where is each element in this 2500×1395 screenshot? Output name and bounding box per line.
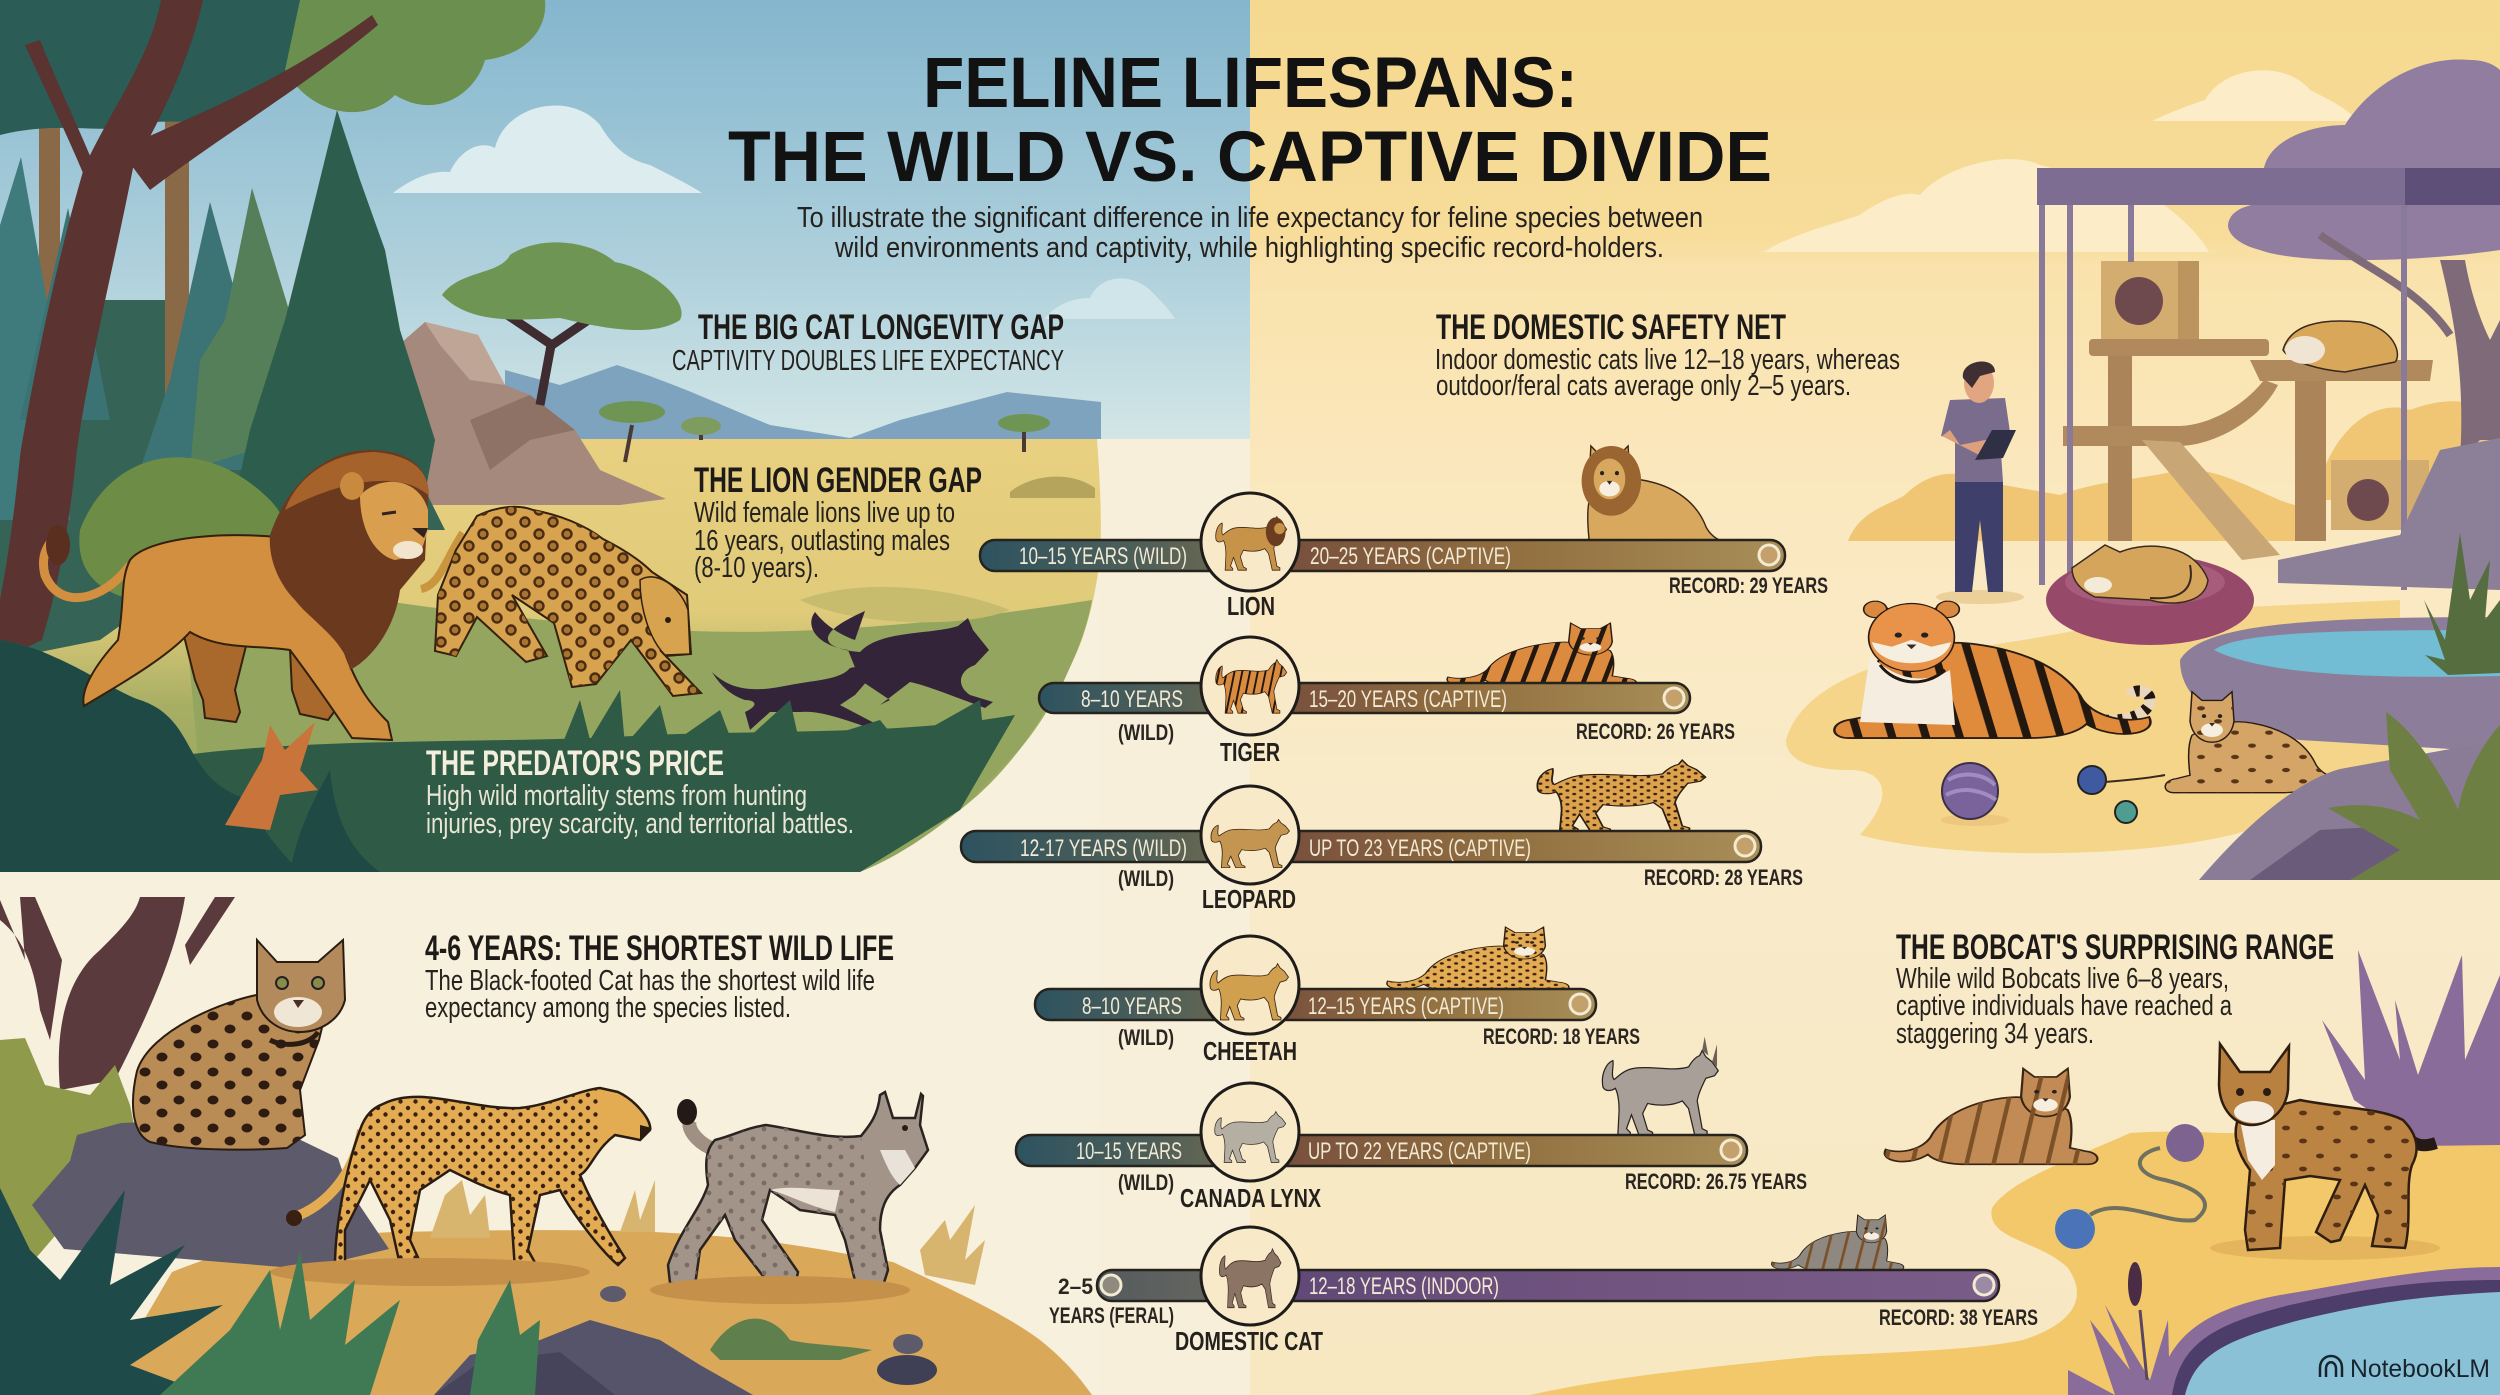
grass band xyxy=(180,560,1092,810)
callout: lion gender gap: 16 years, outlasting males xyxy=(694,525,950,557)
values: leopard: 12-17 YEARS (WILD) xyxy=(1020,835,1187,862)
pond xyxy=(2180,617,2500,752)
rock outcrop xyxy=(393,322,666,505)
bar: domestic cat xyxy=(1097,1270,1999,1301)
values: leopard: RECORD: 28 YEARS xyxy=(1644,865,1803,890)
values: lynx xyxy=(1076,1138,1807,1213)
chart row: canada lynx xyxy=(1016,1037,1807,1213)
animal on bar: lion xyxy=(1566,446,1744,558)
animal on bar: leopard xyxy=(1537,760,1706,831)
toy balls xyxy=(1941,763,2165,826)
person xyxy=(1936,362,2024,604)
values: lynx: CANADA LYNX xyxy=(1180,1183,1321,1213)
icon: lynx xyxy=(1201,1083,1299,1181)
chart row: domestic cat xyxy=(1049,1215,2038,1356)
panel: wild scene xyxy=(0,0,1175,872)
callout: domestic safety net: THE DOMESTIC SAFETY NET xyxy=(1436,308,1786,347)
spiky plant xyxy=(2424,533,2500,675)
callout: predator's price: injuries, prey scarcity, and territorial battles. xyxy=(426,808,854,840)
callout: shortest wild life: 4-6 YEARS: THE SHORTEST WILD LIFE xyxy=(425,929,894,968)
callout: bobcat range xyxy=(1896,928,2334,1050)
values: leopard: LEOPARD xyxy=(1202,884,1296,914)
chart row: leopard xyxy=(961,760,1803,914)
cat tree xyxy=(2063,261,2433,560)
animal on bar: lynx xyxy=(1602,1037,1718,1135)
pine trees xyxy=(0,100,435,520)
grey rock xyxy=(2278,438,2500,590)
animal: bobcat standing xyxy=(2210,1044,2440,1260)
values: cheetah: RECORD: 18 YEARS xyxy=(1483,1024,1640,1049)
foreground rocks xyxy=(434,1320,753,1395)
title: THE WILD VS. CAPTIVE DIVIDE xyxy=(728,118,1772,197)
callout: lion gender gap xyxy=(694,461,982,584)
animal: bobcat resting xyxy=(2165,692,2357,793)
values: leopard: (WILD) xyxy=(1118,866,1174,891)
olive shrubs xyxy=(0,1038,135,1300)
callout: domestic safety net: Indoor domestic cats live 12–18 years, whereas xyxy=(1435,344,1900,376)
callout: bobcat range: While wild Bobcats live 6–8 years, xyxy=(1896,963,2229,995)
hill xyxy=(100,1230,1092,1395)
grass tuft right xyxy=(430,1180,985,1285)
values: cheetah: 12–15 YEARS (CAPTIVE) xyxy=(1308,993,1504,1020)
clouds left xyxy=(393,106,1175,319)
icon: leopard xyxy=(1201,786,1299,884)
forest backdrop xyxy=(0,240,445,660)
callout: predator's price xyxy=(426,744,854,840)
sand ground xyxy=(1530,1132,2500,1395)
icon: domestic cat xyxy=(1201,1227,1299,1325)
big tree trunk xyxy=(0,0,378,660)
orange bushes xyxy=(1848,470,2295,541)
animal on bar: domestic cat xyxy=(1772,1215,1904,1271)
chart row: cheetah xyxy=(1035,927,1640,1066)
chart row: lion xyxy=(980,446,1828,621)
values: tiger: RECORD: 26 YEARS xyxy=(1576,719,1735,744)
callout: predator's price: THE PREDATOR'S PRICE xyxy=(426,744,724,783)
callout: lion gender gap: Wild female lions live up to xyxy=(694,497,955,529)
yarn toys xyxy=(2055,1124,2205,1249)
callout: domestic safety net: outdoor/feral cats average only 2–5 years. xyxy=(1436,370,1851,402)
animal: black-footed cat xyxy=(133,940,345,1150)
callout: big cat longevity gap: CAPTIVITY DOUBLES LIFE EXPECTANCY xyxy=(672,345,1064,377)
reeds xyxy=(2068,1262,2170,1395)
icon: cheetah xyxy=(1201,936,1299,1034)
callout: predator's price: High wild mortality stems from hunting xyxy=(426,780,807,812)
bar: cheetah xyxy=(1035,989,1596,1020)
animal: lion xyxy=(43,450,428,740)
animal: leopard xyxy=(421,507,701,696)
values: cheetah: 8–10 YEARS xyxy=(1082,993,1182,1020)
title: FELINE LIFESPANS: xyxy=(923,44,1578,123)
bar: lynx xyxy=(1016,1135,1747,1166)
acacia tree xyxy=(442,242,682,405)
purple plant xyxy=(2322,950,2500,1146)
tree trunk xyxy=(0,897,235,1090)
values: lion: LION xyxy=(1227,591,1275,621)
values: domestic cat: YEARS (FERAL) xyxy=(1049,1303,1174,1328)
bar: leopard xyxy=(961,831,1761,862)
panel: lower-right scene xyxy=(1530,950,2500,1395)
callout: lion gender gap: (8-10 years). xyxy=(694,552,819,584)
animal: tiger resting xyxy=(1834,601,2150,738)
callout: lion gender gap: THE LION GENDER GAP xyxy=(694,461,982,500)
icon: tiger xyxy=(1201,637,1299,735)
foreground foliage xyxy=(0,640,380,872)
dark foreground xyxy=(0,640,1015,872)
values: leopard: UP TO 23 YEARS (CAPTIVE) xyxy=(1309,835,1531,862)
animal: bobcat lying xyxy=(1885,1069,2097,1164)
chart row: tiger xyxy=(1039,623,1735,767)
values: lion: 10–15 YEARS (WILD) xyxy=(1019,543,1187,570)
pet bed and cat xyxy=(2046,545,2254,645)
values: lynx: 10–15 YEARS xyxy=(1076,1138,1182,1165)
callout: domestic safety net xyxy=(1435,308,1900,402)
subtitle: wild environments and captivity, while highlighting specific record-holders. xyxy=(834,232,1664,264)
pond xyxy=(2157,1267,2500,1395)
values: lion: 20–25 YEARS (CAPTIVE) xyxy=(1310,543,1511,570)
rock xyxy=(32,1118,389,1269)
values: tiger: 8–10 YEARS xyxy=(1081,686,1183,713)
values: domestic cat xyxy=(1049,1273,2038,1356)
tree canopy xyxy=(0,0,545,135)
title xyxy=(728,44,1772,197)
values: lynx: (WILD) xyxy=(1118,1170,1174,1195)
values: domestic cat: 12–18 YEARS (INDOOR) xyxy=(1309,1273,1499,1300)
callout: shortest wild life: The Black-footed Cat has the shortest wild life xyxy=(425,965,875,997)
animal: lynx xyxy=(668,1092,928,1295)
watermark: NotebookLM: NotebookLM xyxy=(2350,1355,2490,1383)
grass tufts xyxy=(560,690,985,790)
animal: cheetah xyxy=(286,1088,652,1270)
values: tiger xyxy=(1081,686,1735,767)
values: lynx: RECORD: 26.75 YEARS xyxy=(1625,1169,1807,1194)
callout: big cat longevity gap xyxy=(672,308,1064,377)
mountains xyxy=(505,365,1101,439)
clouds right xyxy=(1764,70,2357,252)
values: domestic cat: 2–5 xyxy=(1058,1274,1093,1299)
callout: bobcat range: staggering 34 years. xyxy=(1896,1018,2094,1050)
values: cheetah: (WILD) xyxy=(1118,1025,1174,1050)
subtitle: To illustrate the significant difference in life expectancy for feline species between xyxy=(797,202,1703,234)
values: lion xyxy=(1019,543,1828,621)
savanna field xyxy=(0,439,1101,872)
values: tiger: 15–20 YEARS (CAPTIVE) xyxy=(1309,686,1507,713)
values: tiger: TIGER xyxy=(1220,737,1280,767)
subtitle xyxy=(797,202,1703,264)
animal: dark silhouettes xyxy=(712,611,993,730)
values: cheetah: CHEETAH xyxy=(1203,1036,1297,1066)
roof xyxy=(2037,168,2500,205)
foreground leaves xyxy=(2328,712,2500,880)
callout: shortest wild life: expectancy among the species listed. xyxy=(425,992,791,1024)
values: domestic cat: RECORD: 38 YEARS xyxy=(1879,1305,2038,1330)
foreground rock right xyxy=(2199,740,2500,880)
values: leopard xyxy=(1020,835,1803,914)
sleeping lioness xyxy=(2283,321,2397,372)
orange plant xyxy=(225,722,318,830)
foreground plants xyxy=(0,1188,540,1395)
callout: bobcat range: captive individuals have reached a xyxy=(1896,990,2233,1022)
callout: big cat longevity gap: THE BIG CAT LONGEVITY GAP xyxy=(698,308,1064,347)
distant acacias xyxy=(599,401,1095,498)
animal on bar: tiger xyxy=(1447,623,1637,687)
values: domestic cat: DOMESTIC CAT xyxy=(1175,1326,1323,1356)
bar: tiger xyxy=(1039,683,1690,713)
shrubs xyxy=(79,457,289,605)
bar: lion xyxy=(980,540,1785,571)
animal on bar: cheetah xyxy=(1387,927,1569,991)
sand ground xyxy=(1786,600,2400,853)
values: cheetah xyxy=(1082,993,1640,1066)
small shrubs and pebbles xyxy=(270,1258,937,1385)
icon: lion xyxy=(1201,493,1299,591)
tree purple xyxy=(2228,59,2500,460)
posts xyxy=(2042,205,2404,590)
values: tiger: (WILD) xyxy=(1118,720,1174,745)
values: lion: RECORD: 29 YEARS xyxy=(1669,573,1828,598)
callout: bobcat range: THE BOBCAT'S SURPRISING RANGE xyxy=(1896,928,2334,967)
values: lynx: UP TO 22 YEARS (CAPTIVE) xyxy=(1308,1138,1531,1165)
panel: captive enclosure scene xyxy=(1764,59,2500,880)
panel: lower-left scene xyxy=(0,897,1092,1395)
callout: shortest wild life xyxy=(425,929,894,1024)
